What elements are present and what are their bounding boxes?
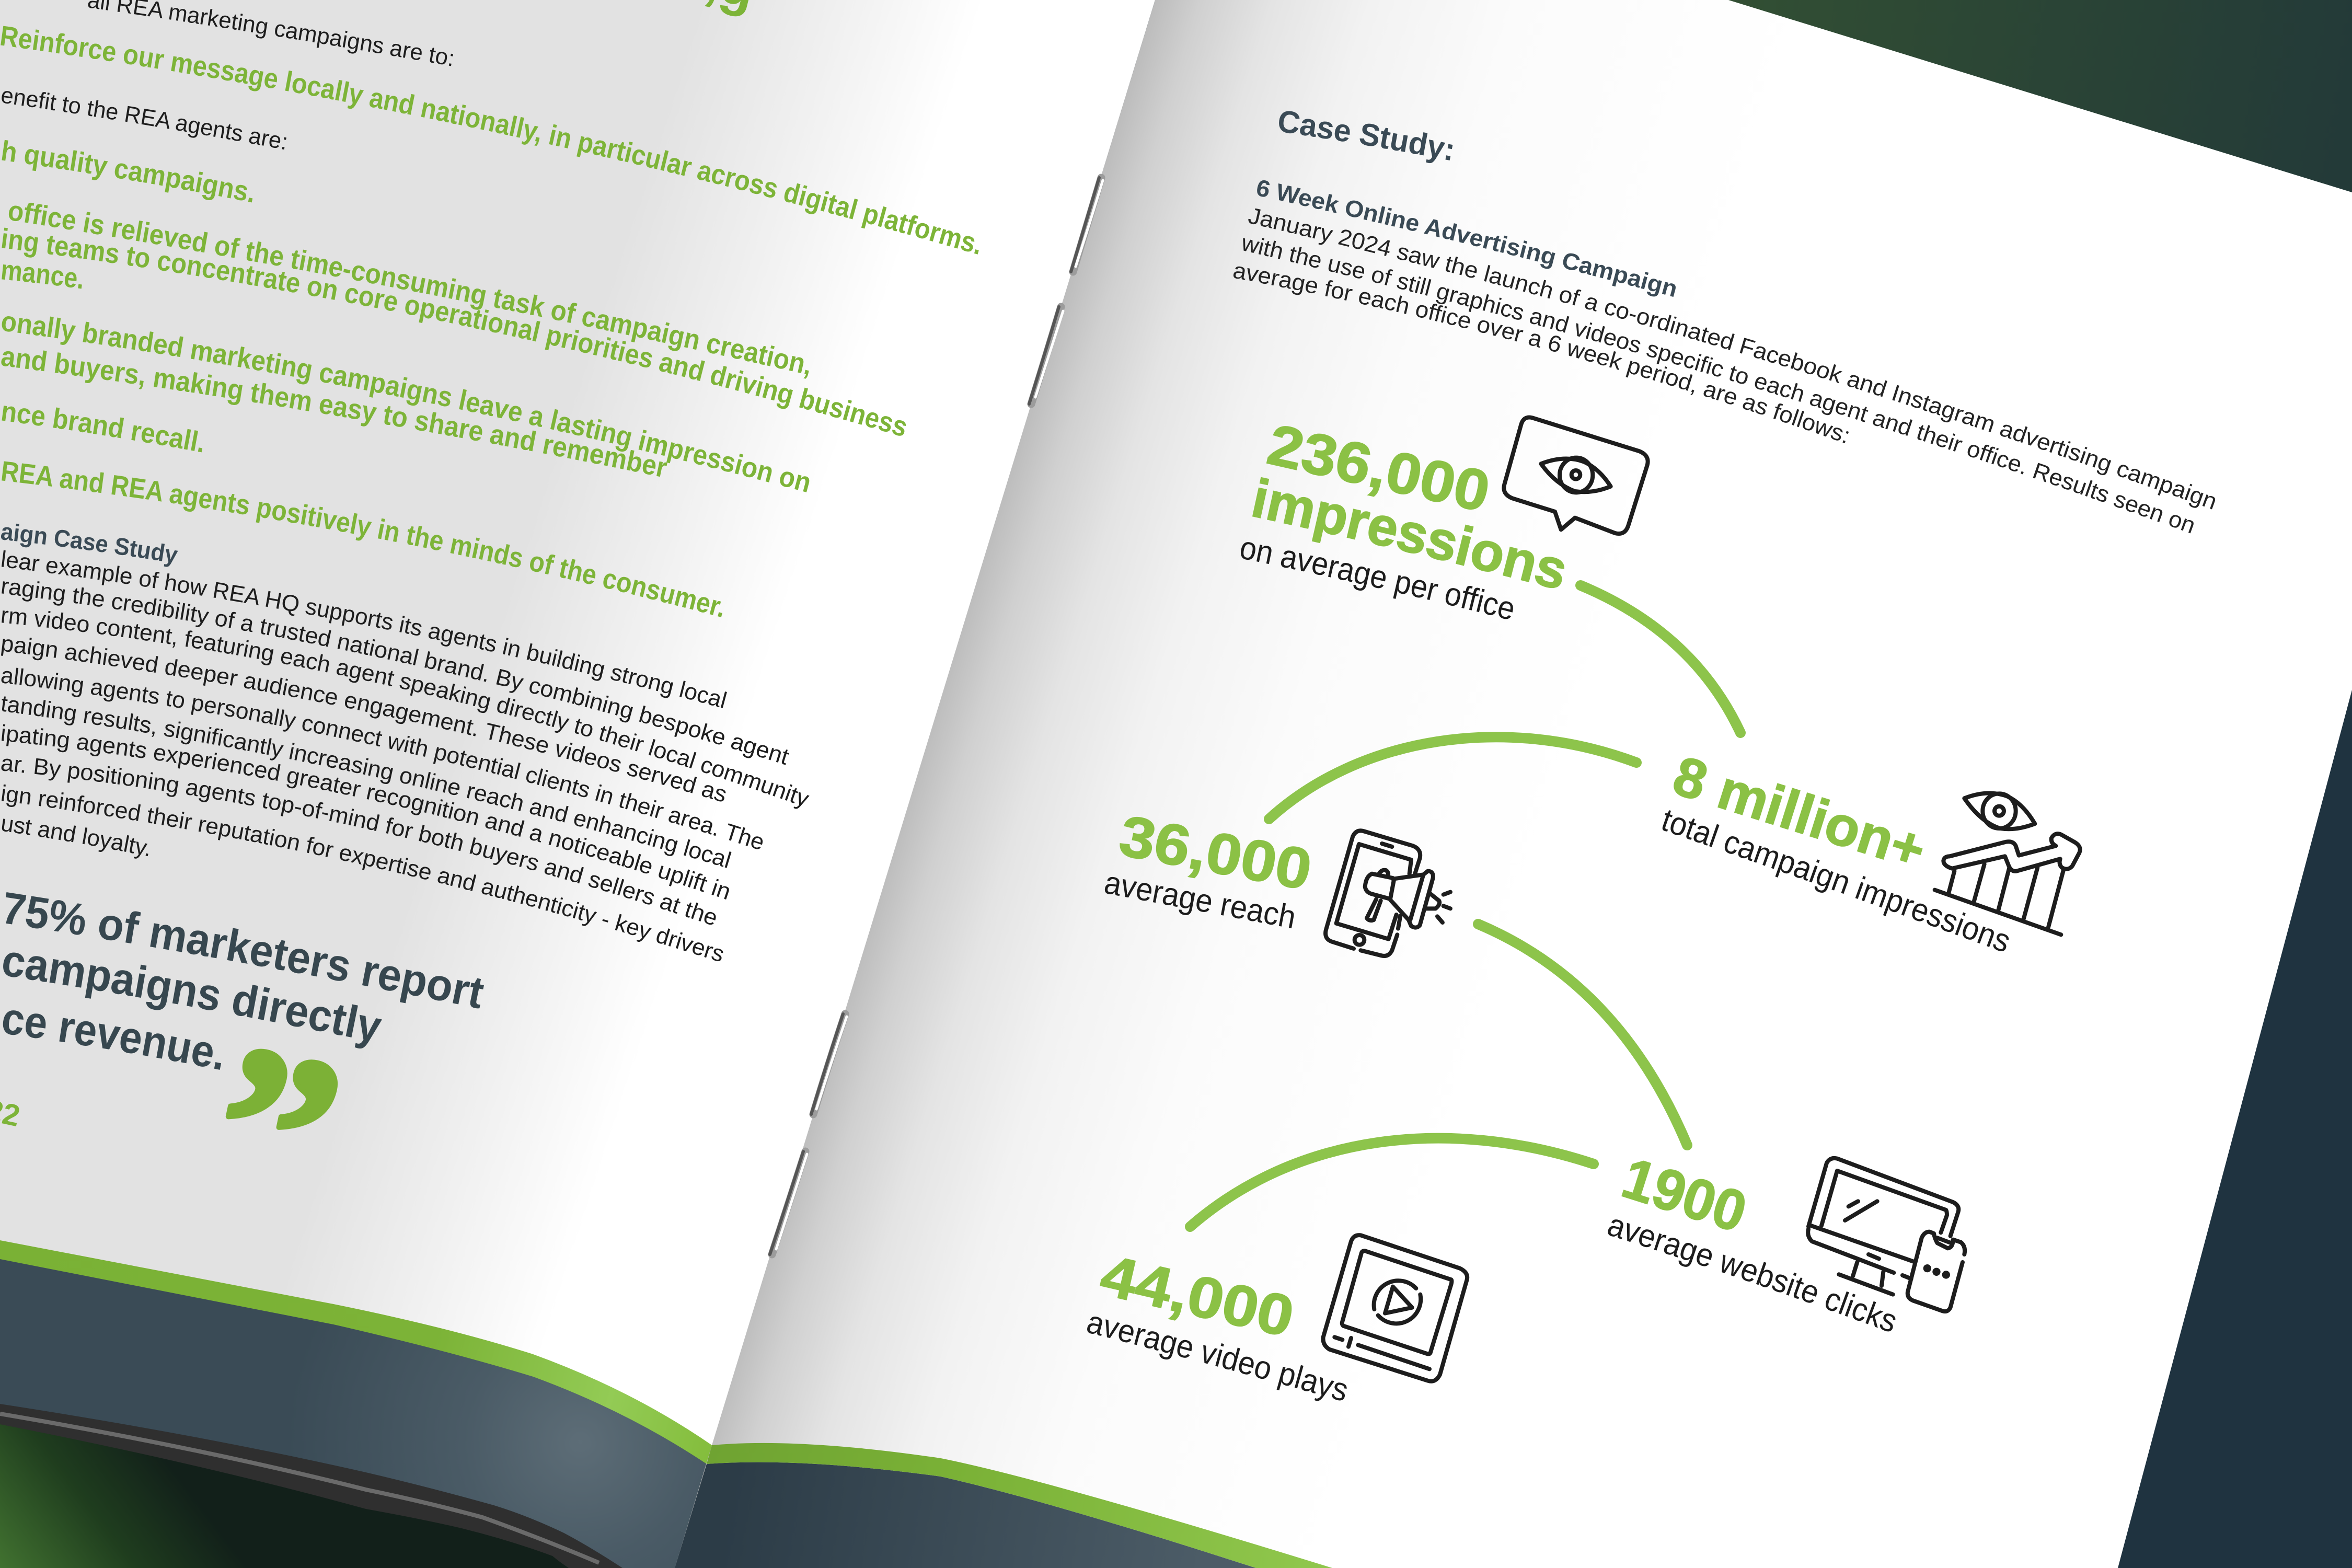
benefit list: h quality campaigns. xyxy=(2,140,253,203)
case study body text: ar. By positioning agents top-of-mind for both buyers and sellers at the xyxy=(0,750,721,931)
intro paragraph: average for each office over a 6 week period, are as follows: xyxy=(1231,258,1853,449)
left footer band xyxy=(0,1257,707,1568)
case study body text xyxy=(0,546,812,967)
stat: 1900 average website clicks: 1900 xyxy=(1615,1146,1754,1244)
case study body text: allowing agents to personally connect with potential clients in their area. The xyxy=(1,668,763,849)
icon: phone with megaphone xyxy=(1325,831,1450,956)
background: dark surface top right xyxy=(1714,0,2352,209)
stat: 44,000 average video plays: 44,000 xyxy=(1095,1243,1300,1350)
benefit list: nce brand recall. xyxy=(2,406,203,453)
benefits intro: enefit to the REA agents are: xyxy=(2,91,286,149)
campaign subtitle: 6 Week Online Advertising Campaign xyxy=(1254,174,1680,302)
case study body text: raging the credibility of a trusted national brand. By combining bespoke agent xyxy=(2,581,789,765)
benefit list: onally branded marketing campaigns leave a lasting impression on xyxy=(2,316,809,492)
benefit list: REA and REA agents positively in the minds of the consumer. xyxy=(2,461,722,617)
arrow: connector 4 xyxy=(1190,1138,1594,1227)
background: navy surface lower right xyxy=(2112,685,2352,1568)
stat: 8 million+ total campaign impressions: total campaign impressions xyxy=(1657,802,2015,960)
right footer band xyxy=(675,1462,1256,1568)
case study body text: ipating agents experienced greater recognition and a noticeable uplift in xyxy=(2,724,729,900)
arrow: connector 1 xyxy=(1581,585,1740,733)
icon: video player xyxy=(1323,1235,1467,1381)
campaign case study heading: aign Case Study xyxy=(1,524,178,567)
stat: 8 million+ total campaign impressions: 8 million+ xyxy=(1666,744,1933,881)
stat: 44,000 average video plays: average video plays xyxy=(1083,1304,1352,1409)
right footer green strip xyxy=(707,1443,1332,1568)
icon: speech bubble with eye xyxy=(1504,418,1648,534)
stat: 236,000 impressions: 236,000 xyxy=(1262,412,1495,524)
stat: 36,000 average reach: average reach xyxy=(1101,864,1299,936)
arrow: connector 3 xyxy=(1478,924,1687,1145)
benefit list: ing teams to concentrate on core operational priorities and driving business xyxy=(2,228,906,436)
panel: left brochure page xyxy=(0,0,1155,1568)
icon: closing quotation mark: ” xyxy=(191,994,361,1273)
pull quote: ce revenue. xyxy=(0,993,230,1080)
panel: right brochure page xyxy=(675,0,2352,1568)
case study body text: ust and loyalty. xyxy=(0,810,154,862)
stat: 1900 average website clicks: average website clicks xyxy=(1604,1207,1902,1340)
left footer green strip xyxy=(0,1240,712,1464)
case study body text: paign achieved deeper audience engagement. These videos served as xyxy=(1,638,725,802)
case study body text: tanding results, significantly increasing online reach and enhancing local xyxy=(2,696,732,868)
benefit list: mance. xyxy=(2,264,82,289)
benefit list: office is relieved of the time-consuming task of campaign creation, xyxy=(8,203,809,379)
case study body text: ign reinforced their reputation for expertise and authenticity - key drivers xyxy=(0,780,728,967)
stat: 236,000 impressions xyxy=(1237,412,1573,628)
pull quote xyxy=(0,883,488,1080)
pull quote: 75% of marketers report xyxy=(0,883,488,1019)
benefit list xyxy=(0,135,911,624)
stat: 1900 average website clicks xyxy=(1604,1146,1902,1340)
stat: 236,000 impressions: impressions xyxy=(1247,468,1573,602)
stat: 44,000 average video plays xyxy=(1083,1243,1352,1409)
benefit list: and buyers, making them easy to share and remember xyxy=(1,350,667,477)
icon: eye over rising bar chart xyxy=(1935,793,2080,935)
arrow: connector 2 xyxy=(1269,737,1636,819)
stat: 36,000 average reach xyxy=(1101,803,1317,936)
binding staples xyxy=(770,178,1103,1254)
case study title: Case Study: xyxy=(1275,103,1458,168)
page stack edge xyxy=(0,1404,622,1568)
case study body text: lear example of how REA HQ supports its agents in building strong local xyxy=(2,550,727,708)
background: green surface lower left xyxy=(0,1411,606,1568)
intro paragraph: with the use of still graphics and videos specific to each agent and their office. Results seen on xyxy=(1239,230,2199,539)
green objective statement: Reinforce our message locally and nationally, in particular across digital platforms. xyxy=(1,26,979,255)
case study body text: rm video content, featuring each agent speaking directly to their local community xyxy=(2,610,810,809)
stat: 236,000 impressions: on average per office xyxy=(1237,529,1519,628)
icon: desktop monitor and phone xyxy=(1808,1158,1965,1311)
pull quote: campaigns directly xyxy=(0,935,386,1053)
stat: 36,000 average reach: 36,000 xyxy=(1115,803,1317,902)
intro paragraph: January 2024 saw the launch of a co-ordinated Facebook and Instagram advertising campaign xyxy=(1246,203,2220,515)
